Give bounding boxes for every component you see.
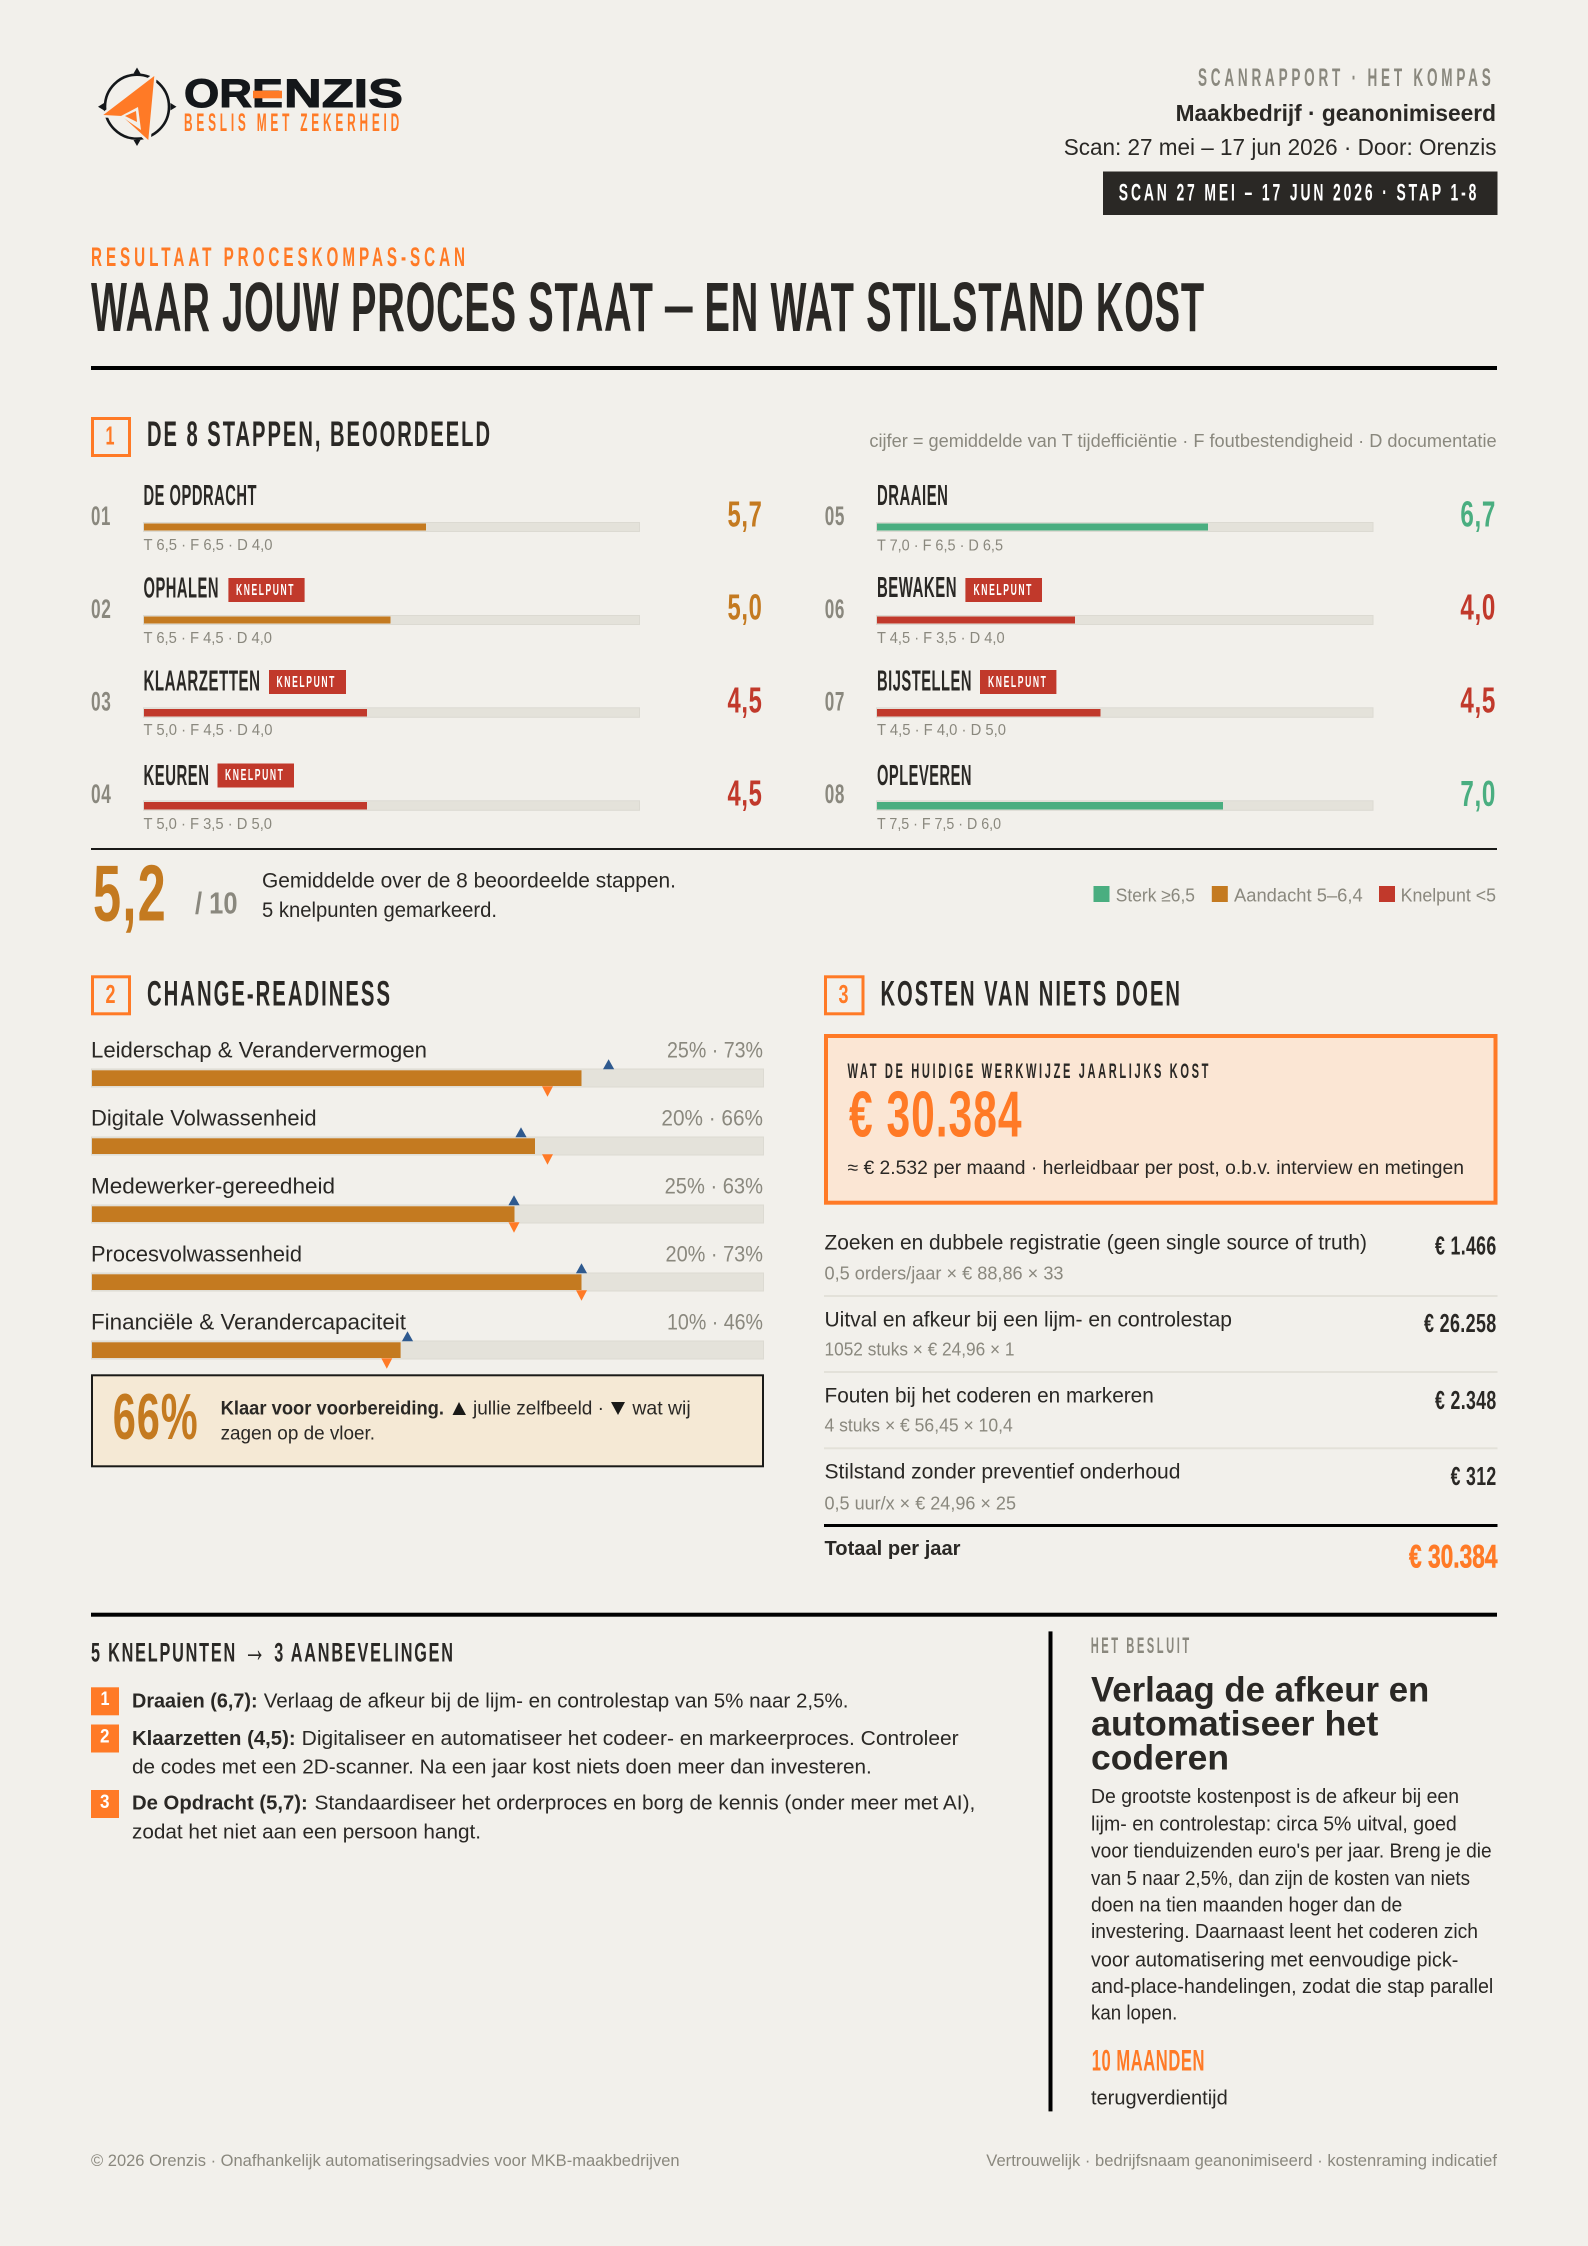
footer bbox=[91, 2151, 1497, 2170]
besluit heading: Verlaag de afkeur en bbox=[1091, 1670, 1429, 1709]
heading: kosten van niets doen: 3 bbox=[838, 979, 848, 1009]
heading: de 8 stappen bbox=[92, 414, 492, 456]
logo wordmark bbox=[184, 72, 403, 116]
besluit text bbox=[1091, 1786, 1493, 2024]
step 01: DE OPDRACHT bbox=[144, 480, 257, 512]
step 08: T 7,5 · F 7,5 · D 6,0 bbox=[877, 816, 1001, 833]
heading: change-readiness bbox=[92, 973, 392, 1014]
besluit heading: automatiseer het bbox=[1091, 1704, 1379, 1743]
heading: change-readiness: CHANGE-READINESS bbox=[147, 973, 392, 1013]
readiness row 4 bbox=[91, 1241, 764, 1301]
readiness row 3: Medewerker-gereedheid bbox=[91, 1173, 335, 1198]
readiness row 5 bbox=[91, 1309, 764, 1369]
step 04: 04 bbox=[91, 779, 112, 809]
besluit text: investering. Daarnaast leent het coderen zich bbox=[1091, 1921, 1478, 1943]
scale note: cijfer = gemiddelde van T tijdefficiëntie · F foutbestendigheid · D documentatie bbox=[869, 431, 1497, 451]
callout: jaarlijkse kosten: ≈ € 2.532 per maand · herleidbaar per post, o.b.v. interview en metingen bbox=[848, 1158, 1464, 1179]
recommendation 3: 3 bbox=[100, 1792, 110, 1813]
callout: readiness score: 66% bbox=[113, 1380, 199, 1453]
legend: Knelpunt <5 bbox=[1401, 886, 1496, 906]
recommendation 1: Draaien (6,7): bbox=[132, 1689, 258, 1712]
besluit heading: coderen bbox=[1091, 1738, 1229, 1777]
step 05: DRAAIEN bbox=[877, 480, 948, 512]
step 04: T 5,0 · F 3,5 · D 5,0 bbox=[144, 816, 272, 833]
step 01: 01 bbox=[91, 501, 111, 531]
step 06: BEWAKEN bbox=[877, 572, 957, 604]
callout: jaarlijkse kosten bbox=[826, 1036, 1496, 1203]
heading: aanbevelingen: 5 KNELPUNTEN → 3 AANBEVELINGEN bbox=[91, 1629, 455, 1671]
besluit text: van 5 naar 2,5%, dan zijn de kosten van niets bbox=[1091, 1868, 1470, 1890]
step 05: 6,7 bbox=[1460, 494, 1496, 535]
average score: 5 knelpunten gemarkeerd. bbox=[262, 899, 497, 922]
heading: de 8 stappen: DE 8 STAPPEN, BEOORDEELD bbox=[147, 414, 492, 454]
recommendation 2: 2 bbox=[100, 1727, 110, 1748]
step 05: T 7,0 · F 6,5 · D 6,5 bbox=[877, 538, 1003, 554]
cost row 1: € 1.466 bbox=[1435, 1232, 1497, 1260]
readiness row 5: Financiële & Verandercapaciteit bbox=[91, 1309, 406, 1334]
cost total: € 30.384 bbox=[1409, 1538, 1498, 1574]
besluit text: lijm- en controlestap: circa 5% uitval, goed bbox=[1091, 1813, 1457, 1835]
recommendation 3: zodat het niet aan een persoon hangt. bbox=[132, 1820, 481, 1843]
recommendation 3: De Opdracht (5,7): bbox=[132, 1791, 308, 1814]
step 06: KNELPUNT bbox=[974, 582, 1033, 599]
title: WAAR JOUW PROCES STAAT bbox=[91, 268, 1125, 346]
readiness row 1: 25% · 73% bbox=[667, 1037, 763, 1062]
step 01: T 6,5 · F 6,5 · D 4,0 bbox=[144, 537, 273, 554]
readiness row 4: Procesvolwassenheid bbox=[91, 1241, 302, 1266]
heading: kosten van niets doen bbox=[826, 973, 1182, 1014]
recommendation 1: 1 bbox=[100, 1689, 110, 1710]
step 04: KEUREN bbox=[144, 760, 210, 792]
step 07: T 4,5 · F 4,0 · D 5,0 bbox=[877, 722, 1006, 739]
panel: het besluit bbox=[1048, 1631, 1493, 2111]
average score bbox=[93, 848, 676, 938]
logo wordmark: OR bbox=[184, 72, 252, 116]
cost row 2: Uitval en afkeur bij een lijm- en controlestap bbox=[824, 1308, 1232, 1331]
step 04: KNELPUNT bbox=[225, 767, 284, 784]
cost row 3: 4 stuks × € 56,45 × 10,4 bbox=[824, 1416, 1013, 1436]
step 02: 02 bbox=[91, 594, 112, 624]
step 01: 5,7 bbox=[728, 494, 762, 535]
step 05: 05 bbox=[825, 501, 845, 531]
step 05 bbox=[825, 480, 1496, 554]
step 03: T 5,0 · F 4,5 · D 4,0 bbox=[144, 722, 273, 739]
logo: Orenzis bbox=[98, 68, 403, 146]
readiness row 4: 20% · 73% bbox=[666, 1241, 763, 1266]
step 02 bbox=[91, 572, 762, 647]
payback period: terugverdientijd bbox=[1091, 2088, 1228, 2110]
besluit text: voor automatisering met eenvoudige pick- bbox=[1091, 1949, 1458, 1971]
cost row 2: € 26.258 bbox=[1424, 1310, 1497, 1338]
payback period: 10 MAANDEN bbox=[1092, 2045, 1205, 2078]
cost row 2 bbox=[824, 1308, 1497, 1359]
readiness row 2: Digitale Volwassenheid bbox=[91, 1105, 317, 1130]
average score: Gemiddelde over de 8 beoordeelde stappen. bbox=[262, 870, 676, 893]
client: Maakbedrijf · geanonimiseerd bbox=[1176, 100, 1496, 126]
step 08: OPLEVEREN bbox=[877, 760, 972, 792]
step 03: 4,5 bbox=[728, 680, 762, 721]
cost row 4: € 312 bbox=[1451, 1463, 1497, 1491]
callout: jaarlijkse kosten: € 30.384 bbox=[849, 1078, 1022, 1151]
besluit text: De grootste kostenpost is de afkeur bij een bbox=[1091, 1786, 1459, 1808]
readiness row 3 bbox=[91, 1173, 764, 1233]
readiness row 2 bbox=[91, 1105, 764, 1165]
cost row 1: Zoeken en dubbele registratie (geen single source of truth) bbox=[824, 1231, 1367, 1254]
recommendation 1: Verlaag de afkeur bij de lijm- en controlestap van 5% naar 2,5%. bbox=[264, 1689, 849, 1712]
readiness row 1 bbox=[91, 1037, 764, 1097]
step 07: BIJSTELLEN bbox=[877, 666, 972, 698]
logo wordmark: NZIS bbox=[284, 72, 403, 116]
average score: / 10 bbox=[195, 885, 238, 920]
panel: aanbevelingen bbox=[91, 1629, 975, 1843]
cost row 1: 0,5 orders/jaar × € 88,86 × 33 bbox=[824, 1263, 1064, 1283]
payback period bbox=[1091, 2045, 1228, 2110]
recommendation 3: Standaardiseer het orderproces en borg de kennis (onder meer met AI), bbox=[314, 1791, 975, 1814]
cost row 2: 1052 stuks × € 24,96 × 1 bbox=[824, 1339, 1014, 1359]
step 02: T 6,5 · F 4,5 · D 4,0 bbox=[144, 630, 272, 647]
eyebrow: RESULTAAT PROCESKOMPAS-SCAN bbox=[91, 242, 469, 272]
besluit text: and-place-handelingen, zodat die stap parallel bbox=[1091, 1976, 1493, 1998]
cost row 4: Stilstand zonder preventief onderhoud bbox=[824, 1460, 1180, 1483]
readiness row 2: 20% · 66% bbox=[661, 1105, 763, 1130]
callout: readiness score: wat wij bbox=[631, 1398, 691, 1419]
step 01 bbox=[91, 480, 762, 554]
callout: readiness score bbox=[92, 1375, 763, 1466]
cost row 4: 0,5 uur/x × € 24,96 × 25 bbox=[824, 1493, 1016, 1513]
panel: section 1, de 8 stappen bbox=[91, 414, 1497, 938]
callout: readiness score: zagen op de vloer. bbox=[221, 1423, 375, 1444]
step 02: KNELPUNT bbox=[236, 582, 295, 599]
step 08: 7,0 bbox=[1460, 773, 1496, 814]
besluit text: voor tienduizenden euro's per jaar. Breng je die bbox=[1091, 1840, 1492, 1862]
recommendation 2 bbox=[91, 1724, 959, 1778]
footer right: Vertrouwelijk · bedrijfsnaam geanonimiseerd · kostenraming indicatief bbox=[986, 2151, 1497, 2170]
besluit heading bbox=[1091, 1670, 1429, 1777]
cost row 3 bbox=[824, 1384, 1497, 1436]
step 04: 4,5 bbox=[728, 773, 762, 814]
report meta header bbox=[1064, 64, 1498, 215]
heading: change-readiness: 2 bbox=[106, 979, 116, 1009]
title block bbox=[91, 242, 1205, 346]
legend: Aandacht 5–6,4 bbox=[1234, 886, 1363, 906]
step 06: 4,0 bbox=[1460, 587, 1496, 628]
recommendation 1 bbox=[91, 1687, 849, 1715]
step 07: KNELPUNT bbox=[988, 674, 1048, 691]
step 06: 06 bbox=[825, 594, 845, 624]
title: — bbox=[665, 278, 693, 334]
callout: jaarlijkse kosten: WAT DE HUIDIGE WERKWIJZE JAARLIJKS KOST bbox=[848, 1060, 1211, 1083]
recommendation 2: Digitaliseer en automatiseer het codeer- en markeerproces. Controleer bbox=[302, 1727, 959, 1750]
legend: Sterk ≥6,5 bbox=[1116, 886, 1195, 906]
heading: de 8 stappen: 1 bbox=[106, 420, 114, 450]
step 03: KNELPUNT bbox=[276, 674, 336, 691]
legend bbox=[1094, 886, 1496, 906]
recommendation 2: de codes met een 2D-scanner. Na een jaar kost niets doen meer dan investeren. bbox=[132, 1755, 872, 1778]
recommendation 2: Klaarzetten (4,5): bbox=[132, 1727, 296, 1750]
step 06 bbox=[825, 572, 1496, 647]
step 08 bbox=[825, 760, 1496, 833]
cost row 1 bbox=[824, 1231, 1497, 1283]
step 03 bbox=[91, 666, 762, 739]
step 02: OPHALEN bbox=[144, 572, 219, 604]
infographic page: BESLIS MET ZEKERHEID bbox=[184, 109, 403, 137]
cost row 3: € 2.348 bbox=[1435, 1387, 1497, 1415]
besluit text: doen na tien maanden hoger dan de bbox=[1091, 1894, 1402, 1916]
step 04 bbox=[91, 760, 762, 833]
cost row 3: Fouten bij het coderen en markeren bbox=[824, 1384, 1154, 1407]
step 07 bbox=[825, 666, 1496, 739]
eyebrow: het besluit: HET BESLUIT bbox=[1091, 1633, 1192, 1658]
step 07: 4,5 bbox=[1460, 680, 1496, 721]
logo wordmark: E bbox=[252, 72, 283, 116]
average score: 5,2 bbox=[93, 848, 167, 938]
besluit text: kan lopen. bbox=[1091, 2002, 1177, 2024]
callout: readiness score: jullie zelfbeeld · bbox=[472, 1398, 604, 1419]
step 03: 03 bbox=[91, 686, 112, 716]
cost row 4 bbox=[824, 1460, 1497, 1513]
cost total bbox=[824, 1538, 1498, 1574]
panel: section 2, change-readiness bbox=[91, 973, 764, 1466]
scan badge bbox=[1103, 172, 1498, 215]
callout: readiness score: Klaar voor voorbereiding. bbox=[221, 1398, 444, 1419]
readiness row 1: Leiderschap & Verandervermogen bbox=[91, 1037, 427, 1062]
step 02: 5,0 bbox=[728, 587, 762, 628]
footer left: © 2026 Orenzis · Onafhankelijk automatiseringsadvies voor MKB-maakbedrijven bbox=[91, 2151, 680, 2170]
heading: kosten van niets doen: KOSTEN VAN NIETS DOEN bbox=[880, 973, 1182, 1013]
step 08: 08 bbox=[825, 779, 845, 809]
cost total: Totaal per jaar bbox=[824, 1538, 961, 1560]
step 07: 07 bbox=[825, 686, 845, 716]
readiness row 5: 10% · 46% bbox=[667, 1309, 763, 1334]
step 06: T 4,5 · F 3,5 · D 4,0 bbox=[877, 630, 1005, 647]
icon: compass bbox=[98, 68, 176, 146]
step 03: KLAARZETTEN bbox=[144, 666, 260, 698]
panel: section 3, kosten van niets doen bbox=[824, 973, 1498, 1574]
scan dates: Scan: 27 mei – 17 jun 2026 · Door: Orenzis bbox=[1064, 134, 1496, 160]
readiness row 3: 25% · 63% bbox=[665, 1173, 763, 1198]
recommendation 3 bbox=[91, 1790, 975, 1843]
